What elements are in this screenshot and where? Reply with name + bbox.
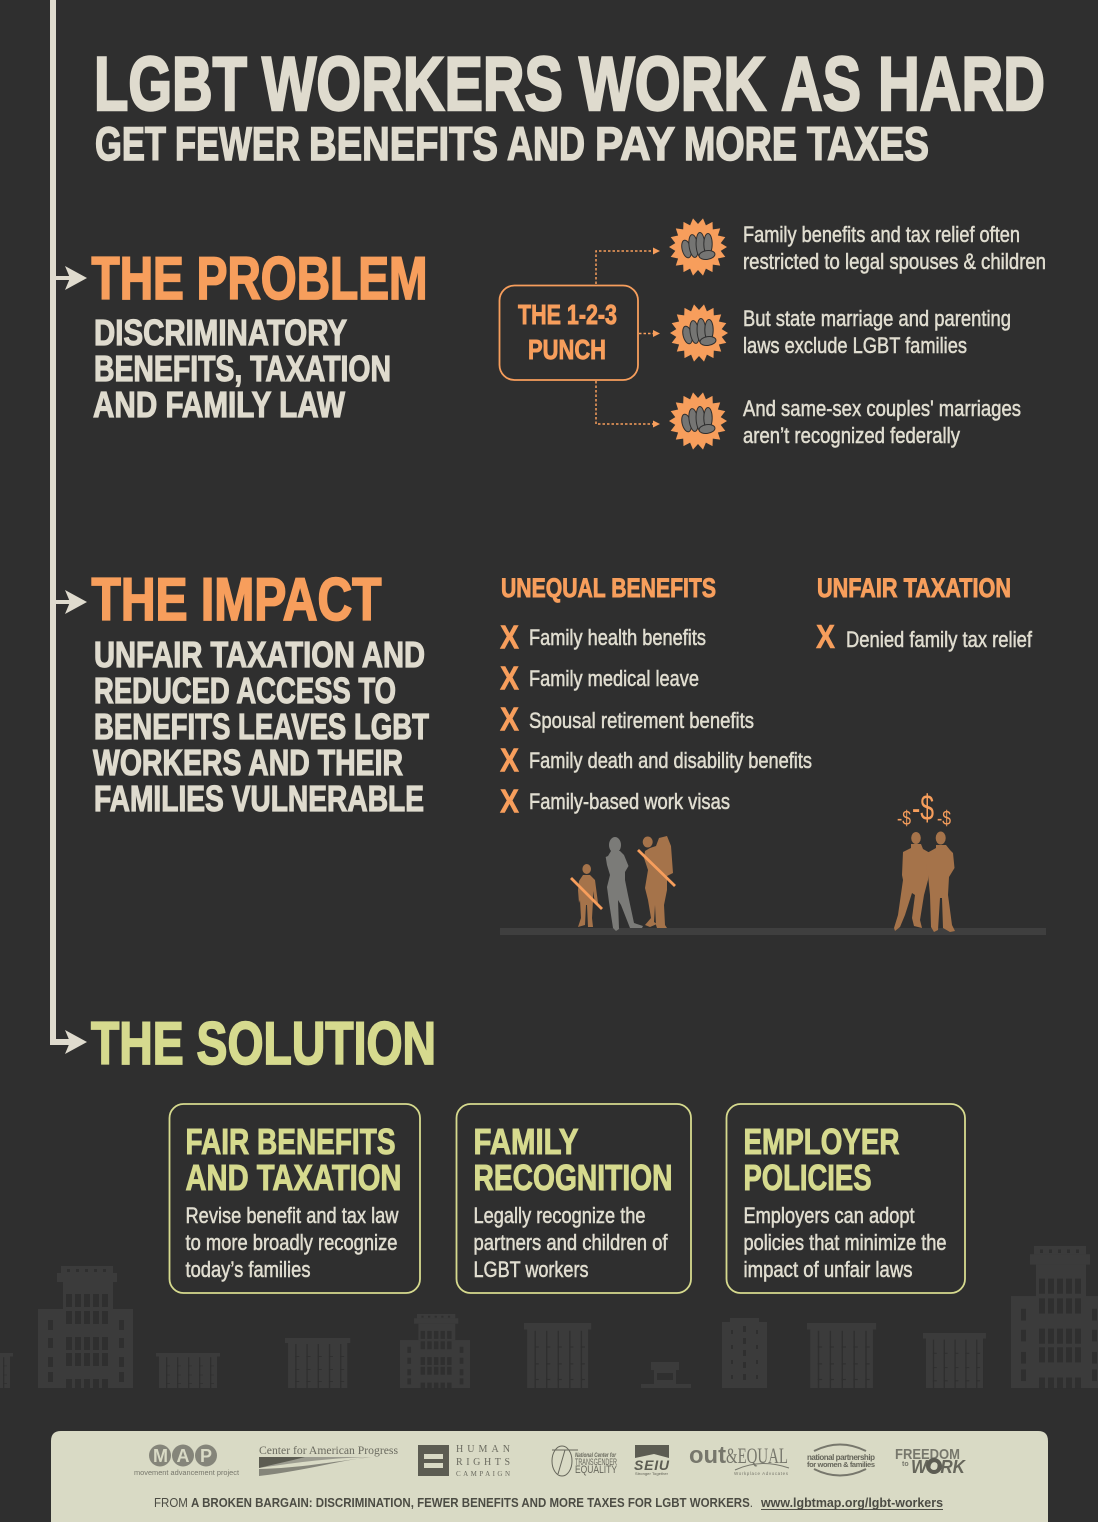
logo: MAP: A: [176, 1446, 190, 1466]
panel: employer policies: policies that minimize the: [744, 1230, 946, 1255]
punch text 1: [743, 222, 1046, 274]
logo: Freedom to Work: [895, 1446, 967, 1477]
logo: Center for American Progress: [259, 1443, 398, 1476]
source link: www.lgbtmap.org/lgbt-workers: [760, 1496, 943, 1510]
subheading: impact description: WORKERS AND THEIR: [93, 742, 403, 783]
title: WORK: [579, 42, 766, 127]
punch text 1: Family benefits and tax relief often: [743, 222, 1020, 247]
source line: FROM A BROKEN BARGAIN: DISCRIMINATION, FEWER BENEFITS AND MORE TAXES FOR LGBT WORKERS.: [154, 1496, 753, 1510]
logo: Human Rights Campaign: CAMPAIGN: [456, 1470, 510, 1478]
list: unequal benefits: X: [500, 782, 519, 820]
punch text 2: [743, 306, 1011, 358]
skyline buildings: [0, 1246, 1098, 1388]
figures: couple with dollar signs: -$: [912, 787, 934, 828]
icon: fist burst 1: [669, 218, 727, 276]
subheading: problem description: AND FAMILY LAW: [93, 384, 345, 425]
list: unequal benefits: Family death and disability benefits: [529, 748, 812, 773]
logo: Out and Equal: out: [689, 1442, 726, 1469]
logo: Out and Equal: [689, 1442, 789, 1476]
panel: employer policies: [726, 1104, 965, 1293]
panel: fair benefits and taxation: today’s families: [186, 1257, 310, 1282]
panel: fair benefits and taxation: AND TAXATION: [186, 1157, 402, 1198]
title: FEWER: [175, 117, 300, 170]
title: MORE: [684, 117, 797, 170]
list: unequal benefits: Family health benefits: [529, 625, 706, 650]
title: TAXES: [807, 117, 929, 170]
list: unfair taxation: Denied family tax relief: [846, 627, 1033, 652]
logo: Human Rights Campaign: HUMAN: [456, 1444, 510, 1455]
footer panel: [51, 1431, 1048, 1522]
title: WORKERS: [262, 42, 563, 127]
subheading: impact description: BENEFITS LEAVES LGBT: [94, 706, 429, 747]
logo: SEIU: Stronger Together: [635, 1471, 669, 1476]
list: unequal benefits: X: [500, 660, 519, 696]
heading: the solution: THE SOLUTION: [91, 1010, 436, 1077]
panel: family recognition: partners and children of: [474, 1230, 668, 1255]
panel: family recognition: Legally recognize the: [474, 1203, 646, 1228]
list: unfair taxation: X: [816, 618, 835, 655]
logo: SEIU: [634, 1445, 670, 1476]
panel: employer policies: POLICIES: [744, 1157, 872, 1198]
subheading: problem description: BENEFITS, TAXATION: [94, 348, 391, 389]
list: unequal benefits: X: [500, 700, 519, 738]
punch text 2: laws exclude LGBT families: [743, 333, 967, 358]
title: AND: [507, 117, 585, 170]
panel: family recognition: FAMILY: [474, 1121, 578, 1162]
title: BENEFITS: [309, 117, 498, 170]
panel: family recognition: LGBT workers: [474, 1257, 588, 1282]
panel: fair benefits and taxation: to more broadly recognize: [186, 1230, 398, 1255]
list: unequal benefits: Family-based work visas: [529, 789, 730, 814]
panel: family recognition: RECOGNITION: [474, 1157, 672, 1198]
subheading: impact description: FAMILIES VULNERABLE: [94, 778, 424, 819]
punch text 3: aren’t recognized federally: [743, 423, 960, 448]
panel: fair benefits and taxation: FAIR BENEFITS: [186, 1121, 396, 1162]
subheading: impact description: UNFAIR TAXATION AND: [94, 634, 425, 675]
logo: MAP: P: [200, 1446, 212, 1466]
logo: National Center for Transgender Equality: EQUALITY: [575, 1464, 618, 1476]
heading: the impact: THE IMPACT: [92, 566, 382, 633]
logo: Center for American Progress: Center for American Progress: [259, 1443, 398, 1457]
logo: MAP: movement advancement project: [134, 1470, 239, 1477]
logo: National Center for Transgender Equality: TRANSGENDER: [575, 1457, 617, 1467]
logo: National Partnership: for women & families: [807, 1460, 875, 1469]
list: unfair taxation: [816, 618, 1033, 655]
figures: couple with dollar signs: -$: [937, 808, 951, 830]
logo: Human Rights Campaign: RIGHTS: [456, 1457, 510, 1468]
icon: fist burst 3: [669, 392, 727, 450]
logo: National Center for Transgender Equality: National Center for: [575, 1453, 616, 1459]
title: LGBT: [94, 42, 247, 127]
panel: employer policies: impact of unfair laws: [744, 1257, 912, 1282]
box: the 1-2-3 punch: PUNCH: [528, 334, 606, 365]
punch text 1: restricted to legal spouses & children: [743, 249, 1046, 274]
logo: National Partnership: [807, 1444, 875, 1476]
subheading: impact description: REDUCED ACCESS TO: [94, 670, 396, 711]
title: PAY: [595, 117, 675, 170]
figures: couple with dollar signs: -$: [897, 808, 911, 830]
logo: SEIU: SEIU: [634, 1457, 670, 1473]
box: the 1-2-3 punch: [500, 286, 638, 380]
logo: Freedom to Work: FREEDOM: [895, 1446, 960, 1463]
logo: Out and Equal: &EQUAL: [726, 1443, 788, 1468]
punch text 2: But state marriage and parenting: [743, 306, 1011, 331]
logo: MAP: [134, 1444, 239, 1477]
logo: National Center for Transgender Equality: [552, 1446, 618, 1476]
heading: unequal benefits: UNEQUAL BENEFITS: [501, 573, 716, 603]
logo: Human Rights Campaign: [418, 1444, 510, 1478]
logo: Freedom to Work: to: [902, 1461, 909, 1468]
heading: unfair taxation: UNFAIR TAXATION: [817, 573, 1011, 603]
panel: employer policies: Employers can adopt: [744, 1203, 914, 1228]
punch text 3: [743, 396, 1021, 448]
list: unequal benefits: Spousal retirement benefits: [529, 708, 754, 733]
panel: employer policies: EMPLOYER: [744, 1121, 900, 1162]
logo: National Partnership: national partnership: [807, 1453, 875, 1462]
title: HARD: [878, 42, 1045, 127]
box: the 1-2-3 punch: THE 1-2-3: [518, 299, 617, 330]
heading: the problem: THE PROBLEM: [92, 245, 428, 312]
figures: couple with dollar signs: [894, 787, 955, 932]
panel: fair benefits and taxation: Revise benefit and tax law: [186, 1203, 399, 1228]
subheading: impact description: [93, 634, 429, 819]
list: unequal benefits: [500, 618, 812, 820]
logo: Freedom to Work: WORK: [911, 1457, 967, 1477]
icon: fist burst 2: [670, 304, 728, 362]
panel: fair benefits and taxation: [170, 1104, 420, 1293]
list: unequal benefits: X: [500, 618, 519, 656]
dotted arrows from punch box: [596, 248, 660, 428]
subheading: problem description: DISCRIMINATORY: [94, 312, 347, 353]
title: AS: [781, 42, 861, 127]
title: [94, 42, 1045, 170]
list: unequal benefits: Family medical leave: [529, 666, 699, 691]
logo: MAP: M: [153, 1446, 168, 1466]
ground strip: [500, 928, 1046, 935]
title: GET: [95, 117, 166, 170]
list: unequal benefits: X: [500, 742, 519, 778]
subheading: problem description: [93, 312, 391, 425]
timeline line with arrows: [50, 0, 87, 1054]
punch text 3: And same-sex couples' marriages: [743, 396, 1021, 421]
figures: family with slashed child and partner: [571, 836, 675, 931]
panel: family recognition: [456, 1104, 691, 1293]
logo: Out and Equal: Workplace Advocates: [734, 1471, 789, 1476]
